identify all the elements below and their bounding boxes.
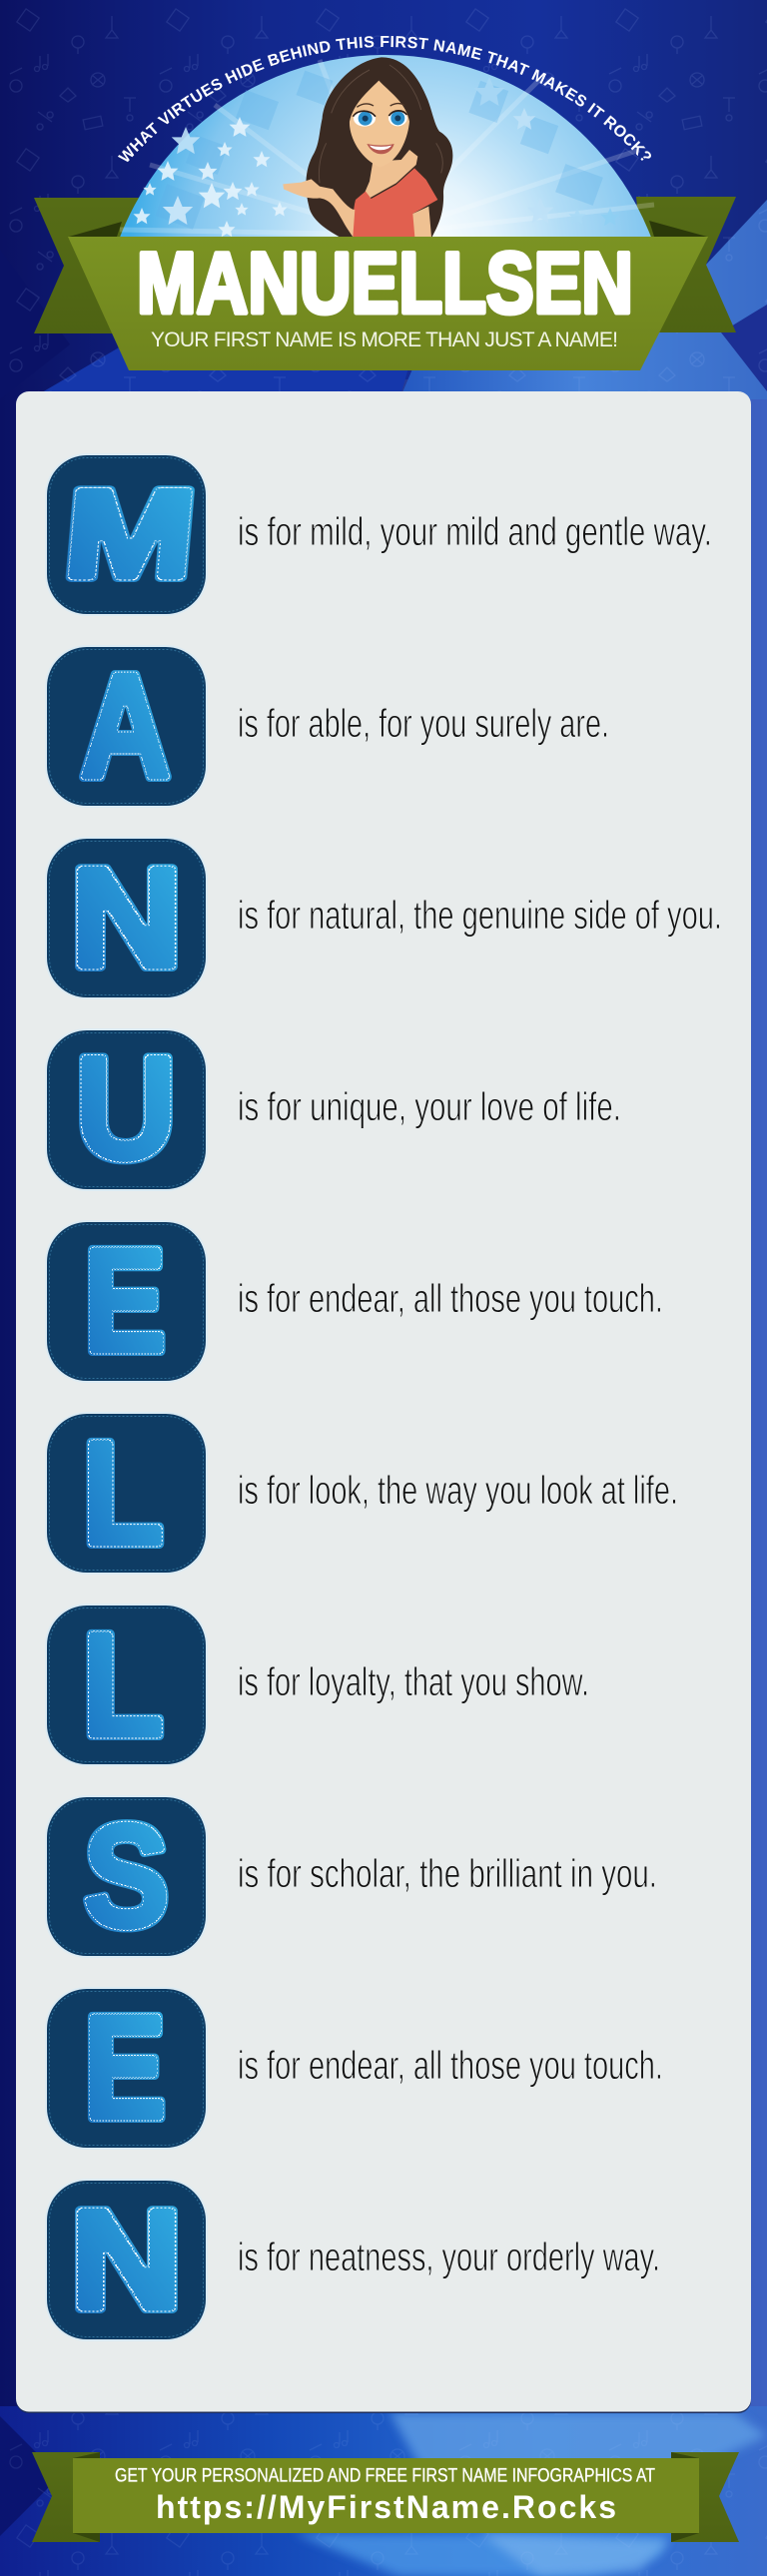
row: S: [45, 1795, 657, 1958]
letter: S: [84, 1795, 169, 1958]
row: L: [45, 1603, 589, 1766]
tile: [45, 2179, 208, 2341]
sentence: is for able, for you surely are.: [238, 702, 609, 746]
footer ribbon: [32, 2452, 739, 2542]
tile: [45, 1220, 208, 1383]
row: N: [45, 2179, 660, 2341]
footer url: https://MyFirstName.Rocks: [156, 2489, 616, 2525]
subtitle: YOUR FIRST NAME IS MORE THAN JUST A NAME!: [151, 328, 618, 351]
face: [350, 81, 409, 167]
row: E: [45, 1985, 663, 2150]
hair: [306, 57, 452, 237]
tile: [45, 1987, 208, 2150]
back ribbon tails: [34, 197, 736, 333]
tile: [45, 1028, 208, 1191]
tile: [45, 645, 208, 808]
character illustration: [283, 57, 452, 237]
tile: [45, 1604, 208, 1766]
row: A: [45, 644, 609, 809]
neck and chest: [365, 150, 417, 198]
footer folds: [73, 2452, 699, 2542]
tile: [45, 453, 208, 616]
row: N: [45, 837, 722, 999]
sentence: is for loyalty, that you show.: [238, 1660, 589, 1704]
name: MANUELLSEN: [137, 236, 633, 331]
letter: L: [82, 1411, 164, 1575]
mouth: [367, 144, 394, 154]
main panel: [16, 391, 751, 2413]
letter: A: [80, 644, 171, 809]
front ribbon: [68, 221, 708, 370]
row: U: [45, 1026, 621, 1191]
sunburst dome: [120, 55, 655, 237]
tile: [45, 1412, 208, 1575]
hand and forearm: [283, 179, 355, 237]
row: L: [45, 1411, 678, 1575]
letter: N: [70, 839, 183, 996]
row: E: [45, 1218, 663, 1383]
letter: L: [82, 1603, 164, 1766]
ribbon folds: [69, 221, 707, 237]
letter: E: [84, 1218, 166, 1382]
ribbon panel: [68, 237, 708, 370]
tile: [45, 837, 208, 999]
footer panel: [73, 2458, 699, 2533]
letter: M: [59, 464, 202, 604]
tile: [45, 1795, 208, 1958]
letter: U: [75, 1026, 177, 1190]
sentence: is for unique, your love of life.: [238, 1085, 621, 1129]
arched tagline: WHAT VIRTUES HIDE BEHIND THIS FIRST NAME THAT MAKES IT ROCK?: [118, 36, 651, 162]
letter: N: [70, 2181, 183, 2338]
blouse: [353, 168, 437, 237]
eyes: [353, 104, 407, 127]
footer tails: [32, 2452, 739, 2542]
hair highlights: [319, 65, 442, 183]
footer line one: GET YOUR PERSONALIZED AND FREE FIRST NAME INFOGRAPHICS AT: [115, 2466, 655, 2486]
letter: E: [84, 1985, 166, 2149]
row: M: [45, 453, 712, 616]
right arm: [412, 207, 431, 237]
